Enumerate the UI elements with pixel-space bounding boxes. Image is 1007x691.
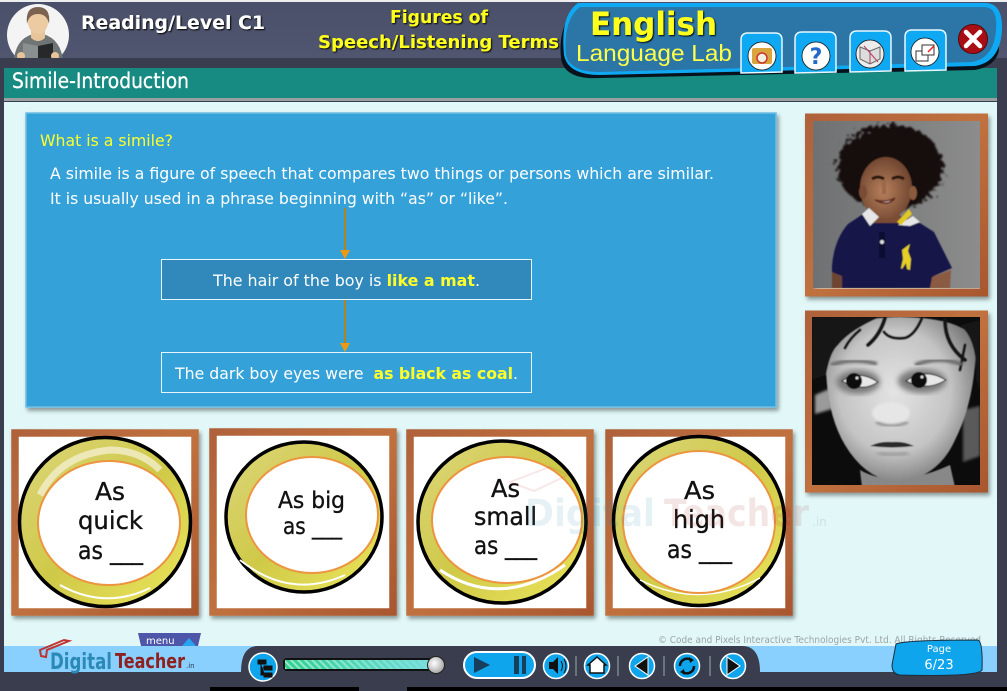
Digital Teacher logo: Digital (50, 650, 112, 675)
tab icon: help: ? (810, 45, 822, 70)
tab icon: book (850, 31, 891, 72)
card text (278, 488, 345, 540)
icon: previous (630, 654, 654, 678)
card text (78, 477, 143, 565)
card text: as ___ (474, 531, 537, 560)
card: as small as (410, 433, 590, 612)
card text: As (491, 474, 520, 503)
media control panel (241, 646, 760, 687)
Digital Teacher logo: .in (186, 662, 195, 670)
progress bar (284, 656, 444, 674)
header: level title: Reading/Level C1 (81, 12, 265, 34)
page indicator: 6/23 (924, 658, 954, 673)
arrow 2 (340, 300, 350, 352)
watermark: Teacher (664, 492, 810, 535)
card: as high as (609, 433, 789, 612)
card text: quick (78, 506, 143, 535)
card text: As big (278, 488, 345, 514)
icon: sound (544, 654, 568, 678)
header: topic title (318, 7, 559, 53)
tab icon: help (795, 32, 836, 73)
icon: next (720, 654, 746, 678)
watermark (510, 467, 827, 535)
section title bar: Simile-Introduction (12, 69, 189, 93)
card: as quick as (15, 433, 195, 612)
question heading: What is a simile? (40, 131, 173, 150)
menu tab (138, 633, 201, 647)
section title bar (4, 68, 997, 101)
lab title (576, 5, 732, 66)
footer bar (4, 646, 1007, 691)
lab title: English (590, 5, 717, 43)
header: topic title: Figures of (390, 7, 488, 28)
watermark: .in (812, 515, 827, 529)
card text (667, 476, 732, 564)
example box 2 (162, 352, 532, 392)
menu tab: menu (146, 636, 175, 647)
card text: high (673, 505, 725, 534)
card text: as ___ (283, 514, 342, 540)
icon: home (584, 654, 610, 678)
example box 1 (162, 260, 532, 300)
example box 1: The hair of the boy is like a mat. (212, 271, 480, 290)
arrow 1 (340, 208, 350, 259)
play and pause capsule (464, 652, 535, 678)
Digital Teacher logo (40, 640, 195, 675)
header avatar: reading man (7, 4, 69, 58)
photo: curly haired boy (809, 118, 984, 292)
page indicator (892, 640, 982, 675)
example box 2: The dark boy eyes were as black as coal. (174, 364, 518, 383)
card text: as ___ (667, 535, 732, 564)
card text: small (474, 502, 537, 531)
panel: what is a simile (26, 113, 776, 407)
card text: As (95, 477, 125, 506)
header: topic title: Speech/Listening Terms (318, 32, 559, 53)
Digital Teacher logo: Teacher (115, 649, 185, 673)
definition text: A simile is a figure of speech that compares two things or persons which are similar. (50, 164, 714, 183)
icon: course tree (249, 653, 277, 681)
tab icon: history folder (741, 33, 782, 73)
definition text (50, 164, 714, 208)
card: as big as (213, 432, 393, 612)
watermark: Digital (525, 492, 655, 535)
definition text: It is usually used in a phrase beginning with “as” or “like”. (50, 189, 508, 208)
page indicator: Page (927, 644, 951, 655)
English Language Lab panel (560, 3, 1002, 78)
card text: as ___ (78, 536, 143, 565)
card text: As (684, 476, 715, 505)
lab title: Language Lab (576, 40, 732, 66)
photo: dark eyed boy (809, 314, 984, 488)
close button (958, 24, 988, 54)
card text (474, 474, 537, 560)
tab icon: window switch (905, 30, 946, 71)
icon: reload (674, 654, 700, 678)
copyright line: © Code and Pixels Interactive Technologies Pvt. Ltd. All Rights Reserved (658, 635, 981, 646)
